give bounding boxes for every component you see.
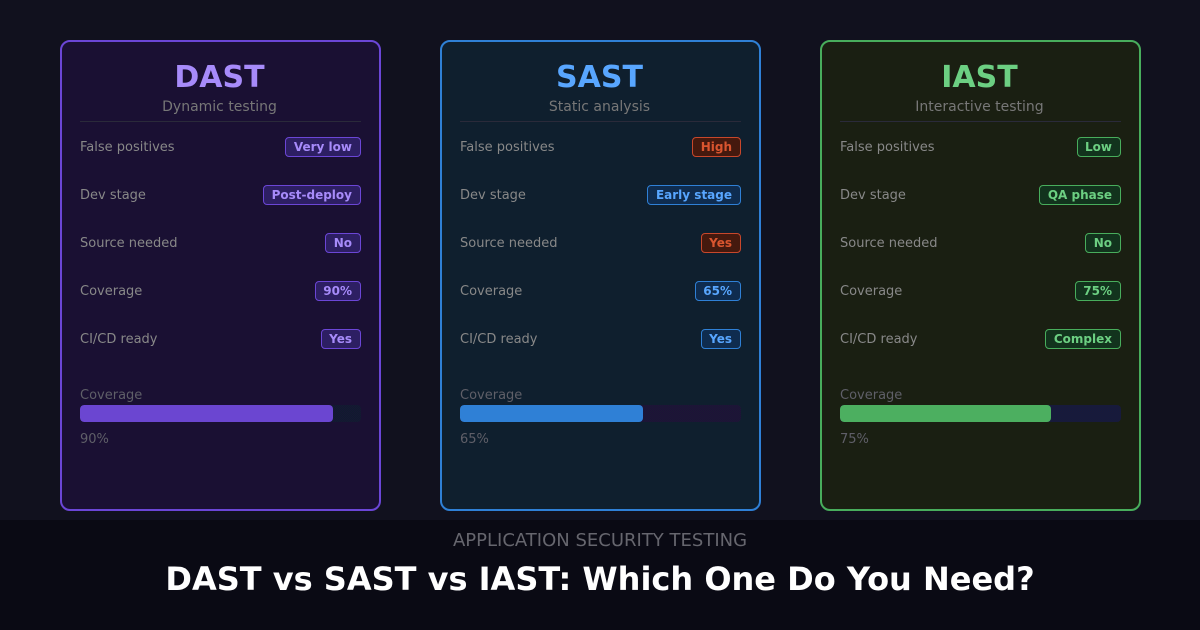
subtitle: IAST: Interactive testing [915, 99, 1044, 115]
row label: dev stage: Dev stage [840, 188, 906, 203]
coverage bar: 65% [460, 405, 741, 422]
badge: 75%: 75% [1083, 284, 1112, 298]
coverage value: 75% [840, 432, 869, 447]
row label: source needed: Source needed [80, 236, 178, 251]
row label: CI/CD ready: CI/CD ready [80, 332, 157, 347]
eyebrow text: APPLICATION SECURITY TESTING [453, 530, 747, 551]
row label: false positives: False positives [80, 140, 175, 155]
badge: high [692, 137, 741, 157]
main title: DAST vs SAST vs IAST: Which One Do You Need? [165, 560, 1035, 598]
badge: post-deploy [263, 185, 361, 205]
badge: no: No [1094, 236, 1112, 250]
coverage value: 65% [460, 432, 489, 447]
badge: QA phase [1039, 185, 1121, 205]
heading: IAST: IAST [941, 60, 1018, 95]
badge: 90%: 90% [323, 284, 352, 298]
badge: yes [321, 329, 361, 349]
badge: complex: Complex [1054, 332, 1112, 346]
badge: post-deploy: Post-deploy [272, 188, 352, 202]
badge: 75% [1075, 281, 1121, 301]
row label: dev stage: Dev stage [80, 188, 146, 203]
coverage bar: 90% [80, 405, 361, 422]
coverage value: 90% [80, 432, 109, 447]
row label: CI/CD ready: CI/CD ready [840, 332, 917, 347]
badge: no: No [334, 236, 352, 250]
badge: yes: Yes [709, 236, 732, 250]
row label: false positives: False positives [460, 140, 555, 155]
badge: 65% [695, 281, 741, 301]
coverage bar label: Coverage [460, 388, 522, 403]
badge: 65%: 65% [703, 284, 732, 298]
badge: yes [701, 329, 741, 349]
coverage bar label: Coverage [840, 388, 902, 403]
row label: dev stage: Dev stage [460, 188, 526, 203]
badge: very low: Very low [294, 140, 352, 154]
badge: QA phase: QA phase [1048, 188, 1112, 202]
badge: very low [285, 137, 361, 157]
badge: 90% [315, 281, 361, 301]
badge: low [1077, 137, 1121, 157]
badge: yes [701, 233, 741, 253]
row label: source needed: Source needed [840, 236, 938, 251]
badge: yes: Yes [329, 332, 352, 346]
badge: complex [1045, 329, 1121, 349]
row label: source needed: Source needed [460, 236, 558, 251]
coverage bar label: Coverage [80, 388, 142, 403]
heading: DAST: DAST [174, 60, 265, 95]
coverage bar: 75% [840, 405, 1121, 422]
badge: early stage [647, 185, 741, 205]
heading: SAST: SAST [556, 60, 643, 95]
footer band [0, 520, 1200, 630]
badge: low: Low [1085, 140, 1112, 154]
badge: no [325, 233, 361, 253]
subtitle: DAST: Dynamic testing [162, 99, 277, 115]
badge: no [1085, 233, 1121, 253]
panel: IAST [820, 40, 1141, 511]
row label: coverage: Coverage [840, 284, 902, 299]
badge: high: High [701, 140, 732, 154]
row label: false positives: False positives [840, 140, 935, 155]
subtitle: SAST: Static analysis [549, 99, 650, 115]
panel: SAST [440, 40, 761, 511]
row label: coverage: Coverage [460, 284, 522, 299]
panel: DAST [60, 40, 381, 511]
badge: yes: Yes [709, 332, 732, 346]
row label: coverage: Coverage [80, 284, 142, 299]
badge: early stage: Early stage [656, 188, 732, 202]
row label: CI/CD ready: CI/CD ready [460, 332, 537, 347]
